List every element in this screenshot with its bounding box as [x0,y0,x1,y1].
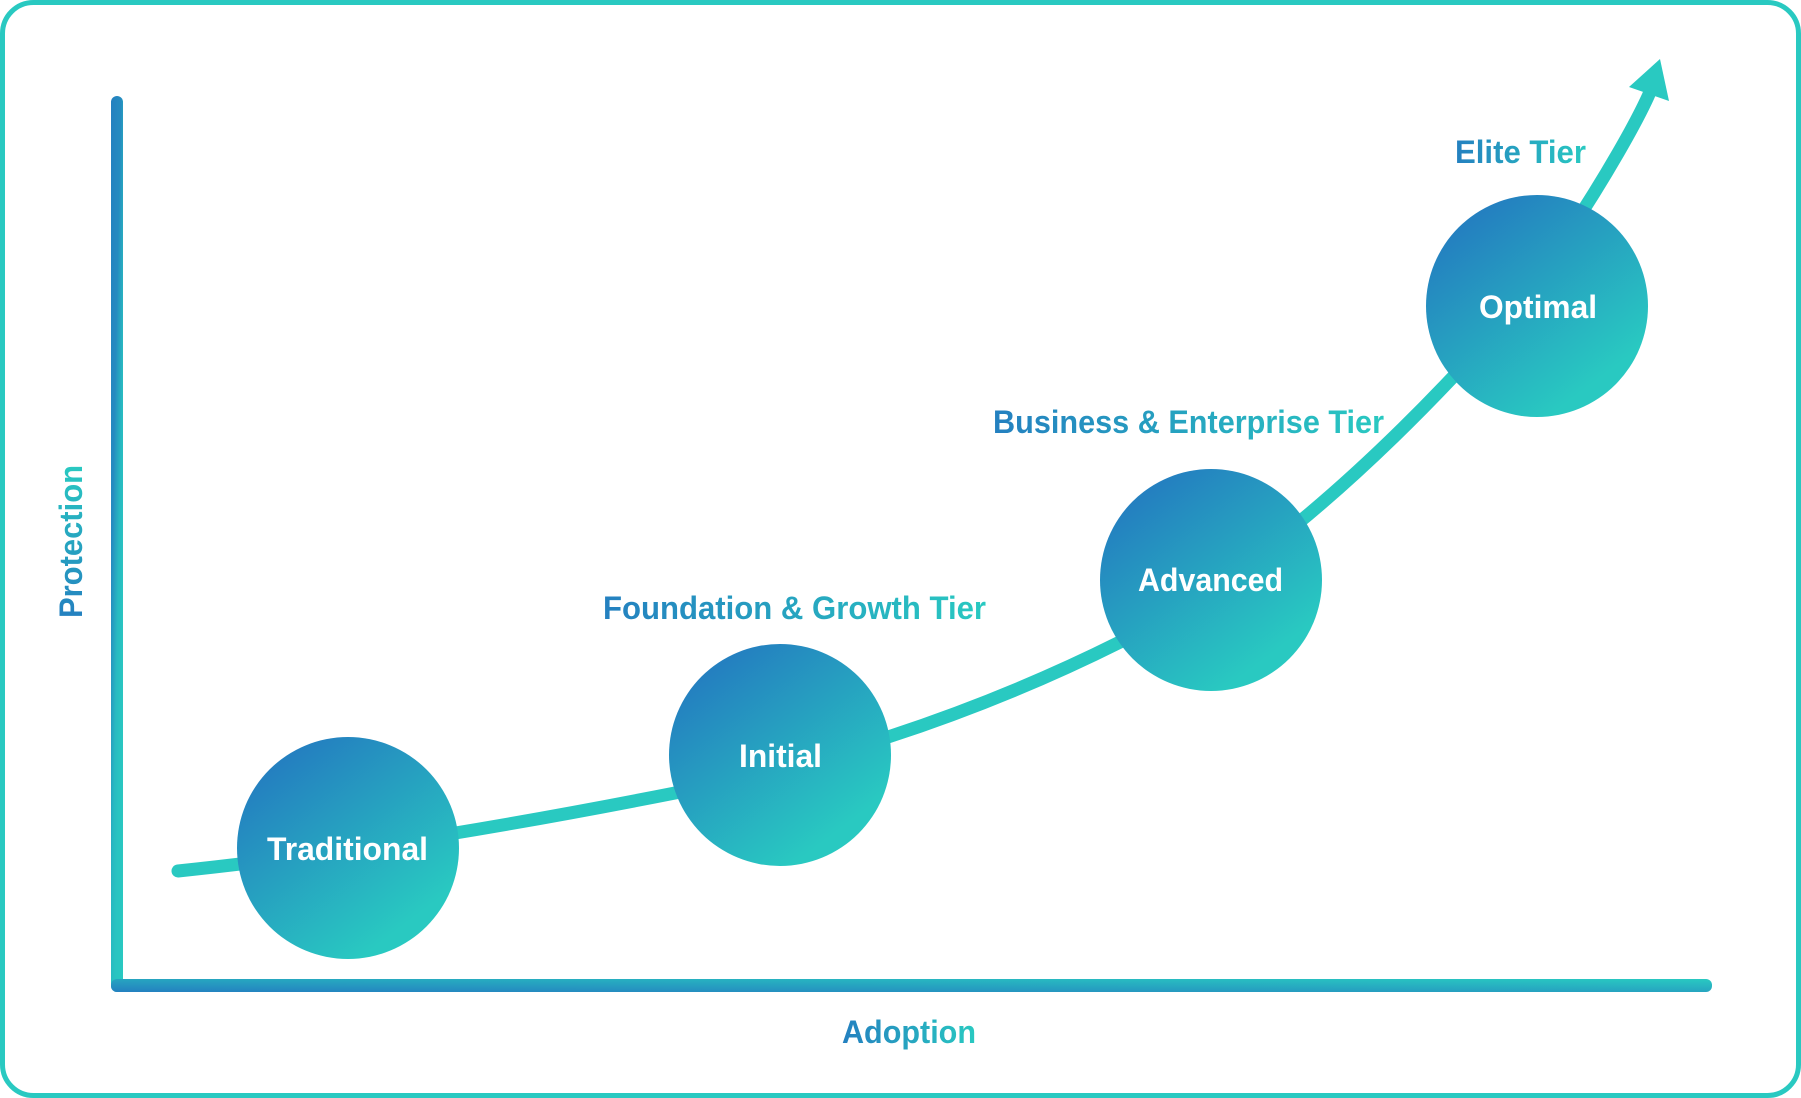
stage: Optimal: Optimal [1479,289,1597,325]
stage: Initial [669,644,891,866]
stage: Traditional: Traditional [267,831,428,867]
stage: Optimal [1426,195,1648,417]
tier label: Business & Enterprise Tier: Business & Enterprise Tier [993,404,1384,440]
stage: Initial: Initial [739,738,822,774]
tier label: Foundation & Growth Tier: Foundation & Growth Tier [603,590,986,626]
y axis label: Protection: Protection [53,465,89,618]
x axis [111,979,1712,992]
x axis label: Adoption: Adoption [842,1014,976,1050]
tier label: Elite Tier: Elite Tier [1455,134,1586,170]
stage: Traditional [237,737,459,959]
stage: Advanced [1100,469,1322,691]
growth curve arrow [178,59,1669,871]
y axis [111,96,123,992]
stage: Advanced: Advanced [1138,562,1283,598]
